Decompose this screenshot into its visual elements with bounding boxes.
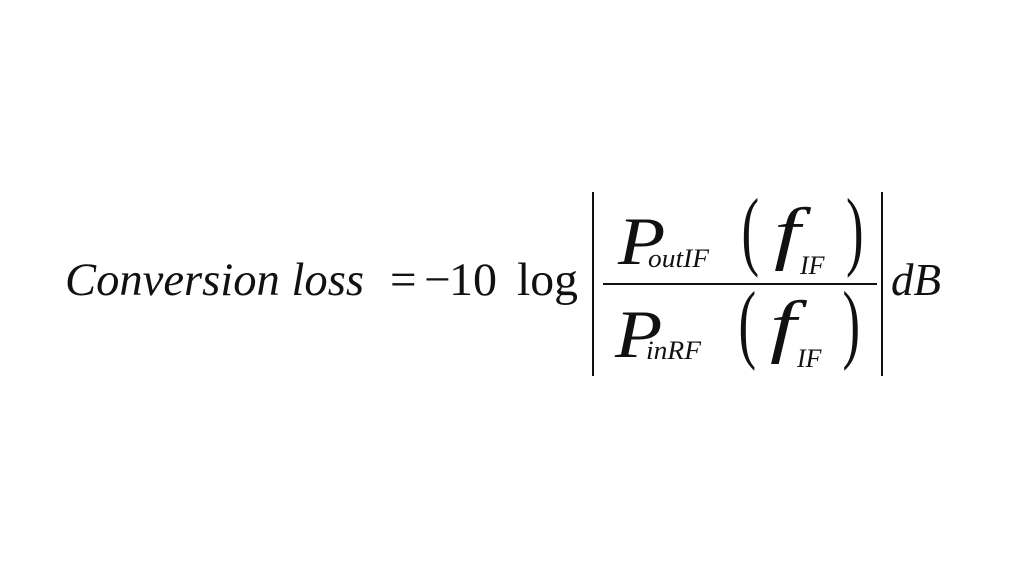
denominator: f: [770, 287, 808, 364]
denominator: [614, 273, 860, 373]
fraction bar: [603, 283, 877, 285]
numerator: P: [617, 203, 665, 279]
numerator: [617, 180, 864, 280]
left absolute value bar: [592, 192, 594, 376]
right absolute value bar: [881, 192, 883, 376]
denominator: inRF: [646, 336, 702, 365]
equals minus ten log: −: [424, 254, 451, 306]
equals minus ten log: =: [390, 254, 417, 306]
denominator: ): [842, 273, 860, 371]
formula left-hand label: Conversion loss: [65, 254, 364, 306]
numerator: outIF: [648, 244, 710, 273]
unit dB: dB: [891, 255, 941, 305]
equals minus ten log: [390, 254, 578, 306]
denominator: (: [738, 273, 756, 371]
numerator: f: [774, 194, 812, 271]
numerator: IF: [799, 251, 826, 280]
equals minus ten log: 10: [449, 254, 497, 306]
denominator: IF: [796, 344, 823, 373]
numerator: ): [846, 180, 864, 278]
numerator: (: [742, 180, 759, 278]
equals minus ten log: log: [517, 254, 578, 306]
denominator: P: [614, 296, 662, 372]
